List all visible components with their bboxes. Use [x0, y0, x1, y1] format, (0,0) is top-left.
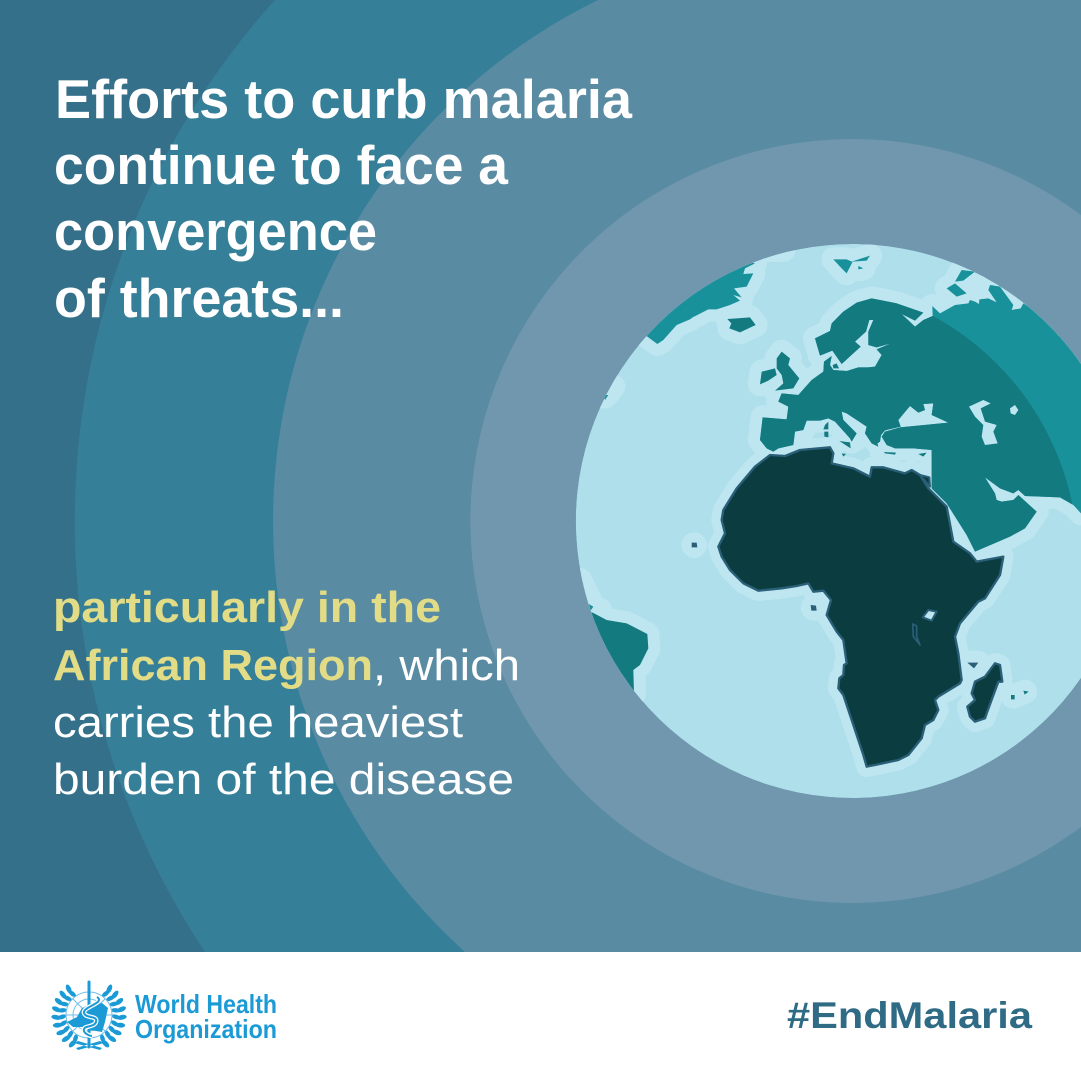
- Mascarene islands: [1011, 691, 1029, 699]
- Atlantic island: [604, 395, 608, 400]
- serpent: [84, 997, 99, 1036]
- coastal halo: [570, 240, 1081, 767]
- laurel wreath: [51, 984, 127, 1050]
- South America edge sliver: [590, 613, 620, 687]
- continents: [67, 1003, 108, 1032]
- third ring: [273, 0, 1081, 952]
- Lake Victoria: [923, 610, 937, 621]
- Iceland: [727, 317, 756, 332]
- WHO wordmark: World Health: [135, 989, 277, 1019]
- African Region statement: particularly in the: [53, 583, 441, 632]
- Caribbean sliver: [589, 604, 593, 611]
- Greenland: [646, 262, 755, 344]
- globe ocean: [576, 244, 1081, 798]
- WHO logo: [51, 982, 277, 1050]
- African Region statement: , which: [373, 641, 520, 690]
- Caspian Sea: [969, 400, 998, 445]
- South America: [591, 612, 648, 691]
- headline: Efforts to curb malaria: [55, 68, 632, 130]
- serpent body: [84, 997, 99, 1036]
- hashtag: #EndMalaria: [787, 995, 1032, 1036]
- African Region statement: burden of the disease: [53, 755, 514, 804]
- globe grid: [66, 992, 112, 1038]
- African Region statement: carries the heaviest: [53, 698, 463, 747]
- headline: convergence: [54, 200, 377, 262]
- land map: [570, 240, 1081, 767]
- staff: [88, 982, 90, 1047]
- Aral Sea: [1010, 405, 1018, 415]
- African Region statement: African Region: [53, 641, 373, 690]
- WHO wordmark: Organization: [135, 1014, 277, 1044]
- white footer band: [0, 952, 1081, 1081]
- WHO emblem: [51, 982, 127, 1050]
- Mediterranean open water: [862, 447, 870, 455]
- Sinai: [920, 475, 930, 487]
- Madagascar: [967, 663, 1002, 722]
- Eurasia darker shaded land: [760, 285, 1081, 552]
- Svalbard: [833, 256, 870, 273]
- inner ring: [470, 139, 1081, 903]
- Zealand islet: [833, 363, 839, 368]
- Eurasia light land: [760, 285, 1081, 552]
- Arctic islands: [947, 270, 975, 297]
- United Kingdom: [775, 352, 799, 391]
- Africa: [718, 447, 1003, 767]
- Mediterranean islands: [823, 422, 927, 457]
- globe: [570, 240, 1081, 798]
- Arctic sliver land: [1000, 280, 1025, 301]
- Lake Tanganyika: [913, 624, 920, 645]
- headline: continue to face a: [54, 134, 508, 196]
- African small islands: [692, 543, 978, 668]
- African Region statement: [53, 583, 520, 804]
- headline: of threats...: [54, 267, 344, 329]
- headline: [54, 68, 632, 329]
- WHO wordmark: [135, 989, 277, 1044]
- Ireland: [760, 368, 777, 384]
